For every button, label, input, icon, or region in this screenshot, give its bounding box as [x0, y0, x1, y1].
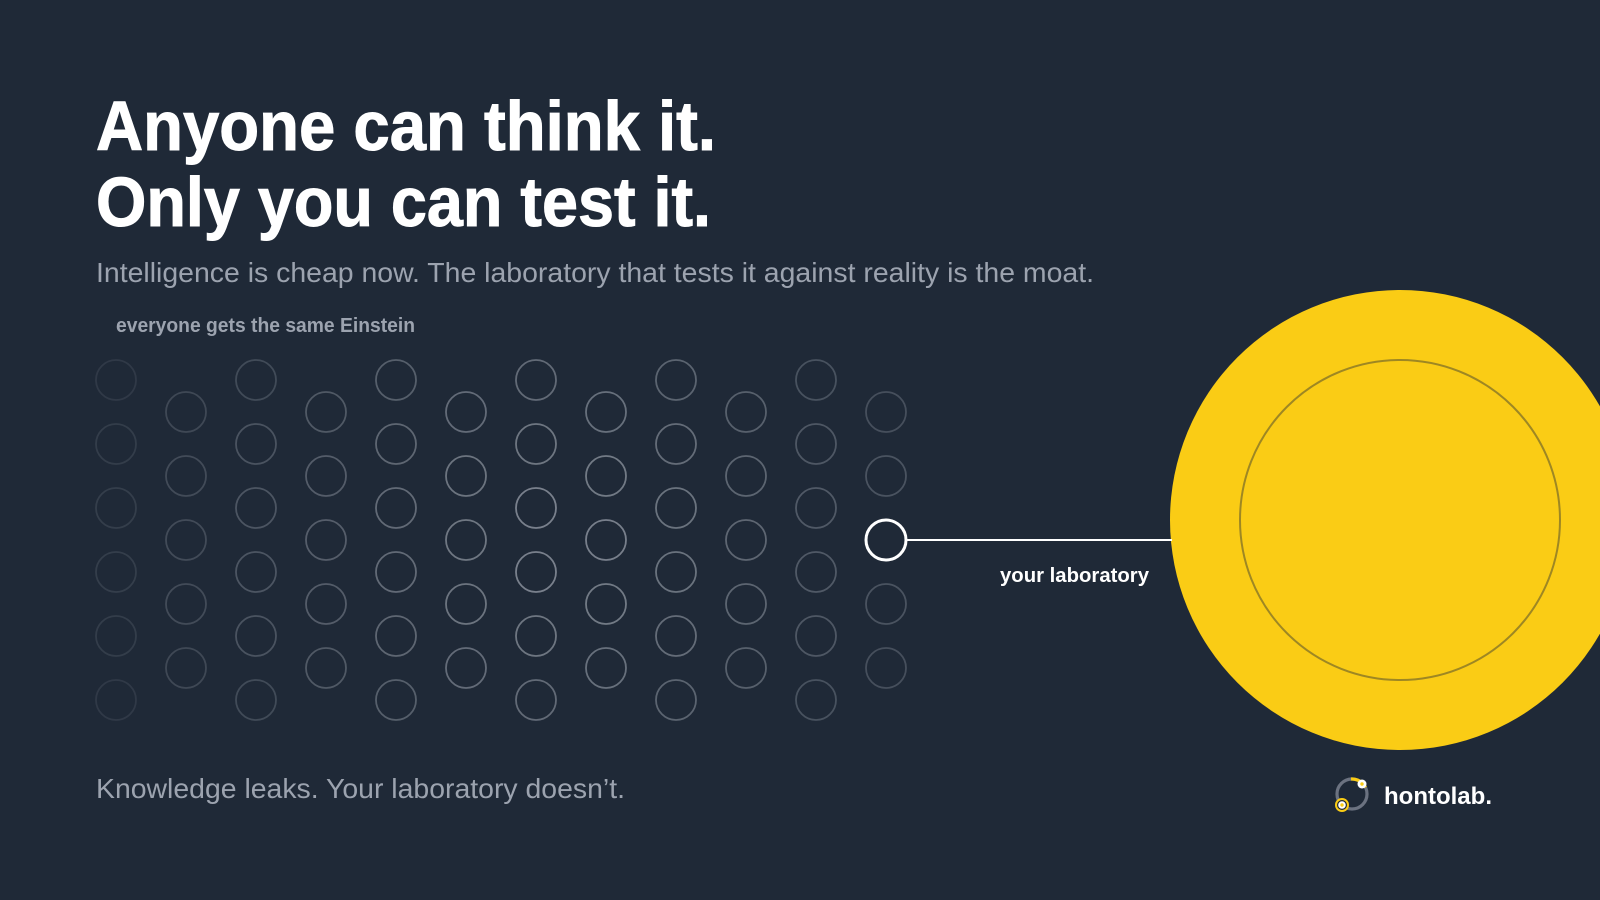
subtitle: Intelligence is cheap now. The laboratory that tests it against reality is the moat. [96, 257, 1094, 288]
circle field: identical intelligences [96, 360, 906, 720]
large yellow laboratory circle [1170, 290, 1600, 750]
label: your laboratory: your laboratory [1000, 564, 1150, 587]
highlighted white circle [866, 520, 906, 560]
closing line: Knowledge leaks. Your laboratory doesn’t. [96, 773, 625, 804]
connector line to laboratory [906, 539, 1172, 541]
brand name: hontolab. [1384, 783, 1492, 810]
title: Only you can test it. [96, 163, 711, 241]
label: everyone gets the same Einstein: everyone gets the same Einstein [116, 315, 415, 337]
title [96, 87, 716, 241]
title: Anyone can think it. [96, 87, 716, 165]
logo icon [1336, 779, 1367, 811]
